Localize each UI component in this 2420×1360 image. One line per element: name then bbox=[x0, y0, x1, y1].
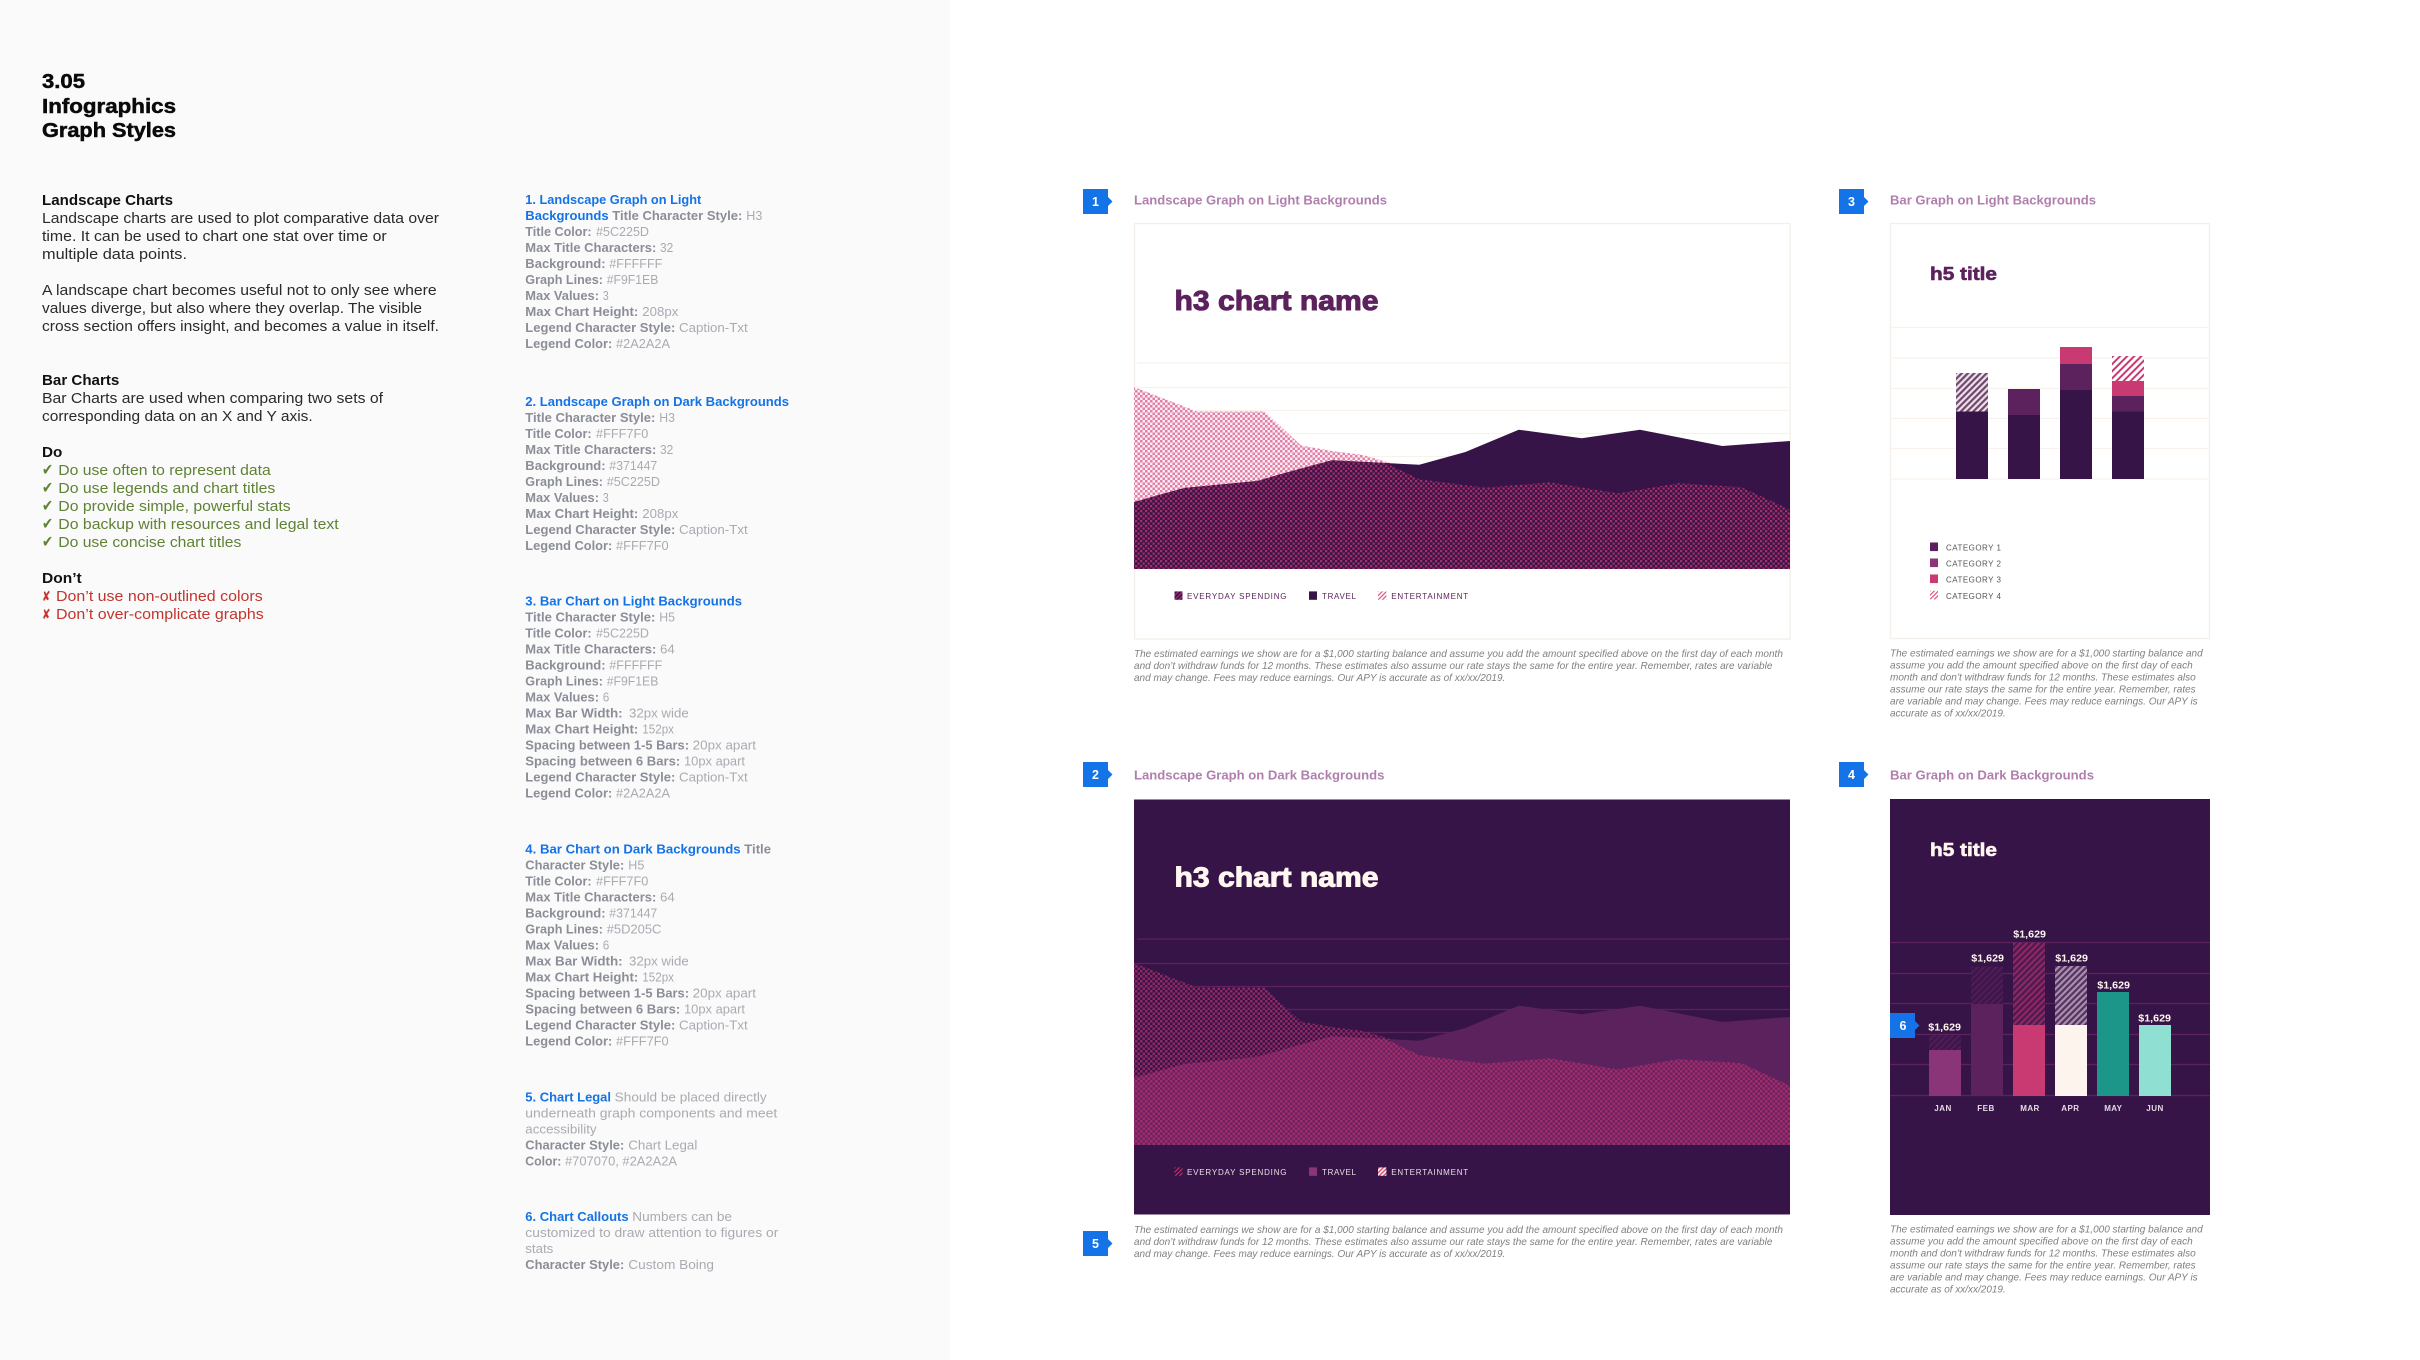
marker 2: 2 bbox=[1092, 768, 1099, 782]
spec block 4: bar chart on dark: Legend Character Style: bbox=[525, 1017, 675, 1032]
spec block 1: landscape graph on light: 208px bbox=[642, 304, 679, 319]
spec block 1: landscape graph on light: Background: bbox=[525, 256, 606, 271]
spec block 3: bar chart on light: Caption-Txt bbox=[679, 770, 748, 784]
legal text chart 2: The estimated earnings we show are for a $1,000 starting balance and assume you add the amount specified above on the first day of each month bbox=[1134, 1224, 1783, 1236]
spec block 3: bar chart on light: #2A2A2A bbox=[616, 786, 670, 800]
bar: mar: MAR bbox=[2020, 1104, 2040, 1113]
spec block 3: bar chart on light: Spacing between 1-5 Bars: bbox=[525, 738, 689, 752]
spec block 4: bar chart on dark: 32px wide bbox=[629, 953, 689, 968]
list: don't: Don’t use non-outlined colors bbox=[56, 588, 263, 605]
legal text chart 2 bbox=[1134, 1224, 1783, 1260]
text block: bar charts: Bar Charts bbox=[42, 372, 119, 389]
spec block 3: bar chart on light: Max Values: bbox=[525, 690, 599, 704]
legal text chart 4 bbox=[1890, 1224, 2204, 1296]
spec block 1: landscape graph on light: Title Color: bbox=[525, 224, 592, 239]
spec block 4: bar chart on dark: H5 bbox=[628, 857, 644, 872]
legal text chart 3: are variable and may change. Fees may reduce earnings. Our APY is bbox=[1890, 696, 2198, 708]
spec block 1: landscape graph on light: #F9F1EB bbox=[607, 272, 658, 287]
spec block 4: bar chart on dark: Legend Color: bbox=[525, 1033, 612, 1048]
spec block 2: landscape graph on dark: Max Title Characters: bbox=[525, 442, 656, 457]
spec block 3: bar chart on light: Title Character Style: bbox=[525, 610, 655, 624]
spec block 1: landscape graph on light: #5C225D bbox=[596, 224, 649, 239]
bar: jan bbox=[1928, 1022, 1961, 1113]
legal text chart 1 bbox=[1134, 648, 1783, 684]
bar: feb: $1,629 bbox=[1971, 952, 2004, 964]
spec block 1: landscape graph on light: #2A2A2A bbox=[616, 336, 670, 351]
bar: jun bbox=[2138, 1012, 2171, 1113]
area: everyday spending bbox=[1134, 1036, 1790, 1145]
panel: bar chart on light background bbox=[1890, 224, 2210, 638]
spec block 4: bar chart on dark: 20px apart bbox=[693, 985, 756, 1000]
bar: jun: $1,629 bbox=[2138, 1012, 2171, 1024]
chart title: h5 title bbox=[1930, 264, 1997, 284]
spec block 3: bar chart on light: Legend Character Style: bbox=[525, 770, 675, 784]
legal text chart 4: accurate as of xx/xx/2019. bbox=[1890, 1284, 2006, 1296]
spec block 3: bar chart on light: Legend Color: bbox=[525, 786, 612, 800]
marker 1 bbox=[1083, 189, 1112, 214]
bar 3 bbox=[2060, 347, 2092, 479]
spec block 4: bar chart on dark: Max Title Characters: bbox=[525, 889, 656, 904]
spec block 4: bar chart on dark: Title bbox=[744, 841, 771, 856]
list: do: ✔ bbox=[42, 532, 53, 551]
spec block 1: landscape graph on light: Max Chart Height: bbox=[525, 304, 638, 319]
spec block 2: landscape graph on dark: Title Character Style: bbox=[525, 410, 655, 425]
spec block 4: bar chart on dark bbox=[525, 841, 771, 1048]
spec block 2: landscape graph on dark: 2. Landscape Graph on Dark Backgrounds bbox=[525, 394, 789, 409]
spec block 4: bar chart on dark: Max Chart Height: bbox=[525, 969, 638, 984]
spec block 5: chart legal: Color: bbox=[525, 1153, 561, 1168]
legal text chart 4: assume you add the amount specified above on the first day of each bbox=[1890, 1236, 2193, 1248]
spec block 5: chart legal: Chart Legal bbox=[628, 1137, 697, 1152]
spec block 1: landscape graph on light: Backgrounds bbox=[525, 208, 609, 223]
legal text chart 2: and don’t withdraw funds for 12 months. These estimates also assume our rate stays the same for the entire year. Remember, rates are variable bbox=[1134, 1236, 1773, 1248]
spec block 1: landscape graph on light: Graph Lines: bbox=[525, 272, 603, 287]
panel: guidelines sidebar bbox=[0, 0, 950, 1360]
spec block 1: landscape graph on light: Max Values: bbox=[525, 288, 599, 303]
chart title: h5 title bbox=[1930, 840, 1997, 860]
text block: landscape charts: time. It can be used to chart one stat over time or bbox=[42, 228, 387, 245]
legend: EVERYDAY SPENDING bbox=[1187, 1168, 1286, 1177]
list: do: Do bbox=[42, 444, 62, 461]
area: entertainment bbox=[1134, 387, 1390, 569]
legal text chart 4: assume our rate stays the same for the entire year. Remember, rates bbox=[1890, 1260, 2196, 1272]
marker 4: 4 bbox=[1848, 768, 1855, 782]
bar: jan: JAN bbox=[1934, 1104, 1952, 1113]
spec block 4: bar chart on dark: #371447 bbox=[609, 905, 657, 920]
spec block 5: chart legal: underneath graph components and meet bbox=[525, 1105, 778, 1120]
text block: landscape charts: Landscape charts are used to plot comparative data over bbox=[42, 210, 439, 227]
area: travel bbox=[1134, 1006, 1790, 1145]
marker 4 bbox=[1839, 762, 1868, 787]
legal text chart 3: assume our rate stays the same for the entire year. Remember, rates bbox=[1890, 684, 2196, 696]
spec block 4: bar chart on dark: 152px bbox=[642, 969, 674, 984]
spec block 3: bar chart on light: 64 bbox=[660, 642, 675, 656]
spec block 4: bar chart on dark: Max Values: bbox=[525, 937, 599, 952]
spec block 5: chart legal: 5. Chart Legal bbox=[525, 1089, 611, 1104]
list: don't: Don’t over-complicate graphs bbox=[56, 606, 264, 623]
spec block 1: landscape graph on light bbox=[525, 192, 762, 351]
spec block 2: landscape graph on dark: #371447 bbox=[609, 458, 657, 473]
text block: landscape charts: Landscape Charts bbox=[42, 192, 173, 209]
list: don't bbox=[42, 570, 264, 623]
spec block 2: landscape graph on dark: 208px bbox=[642, 506, 679, 521]
title bbox=[42, 71, 176, 142]
title: Graph Styles bbox=[42, 120, 176, 142]
spec block 3: bar chart on light: Graph Lines: bbox=[525, 674, 603, 688]
spec block 5: chart legal bbox=[525, 1089, 778, 1168]
marker 6 bbox=[1890, 1013, 1920, 1038]
legend bbox=[1174, 1167, 1468, 1177]
legal text chart 4: The estimated earnings we show are for a $1,000 starting balance and bbox=[1890, 1224, 2204, 1236]
chart title: h3 chart name bbox=[1174, 862, 1378, 892]
heading: landscape light: Landscape Graph on Light Backgrounds bbox=[1134, 192, 1387, 208]
legend: CATEGORY 1 bbox=[1946, 544, 2002, 552]
legal text chart 1: and may change. Fees may reduce earnings. Our APY is accurate as of xx/xx/2019. bbox=[1134, 672, 1505, 684]
legend: CATEGORY 2 bbox=[1946, 560, 2002, 568]
bar: feb bbox=[1971, 952, 2004, 1113]
spec block 2: landscape graph on dark: Legend Character Style: bbox=[525, 522, 675, 537]
list: do: Do provide simple, powerful stats bbox=[58, 498, 291, 515]
spec block 5: chart legal: accessibility bbox=[525, 1121, 597, 1136]
spec block 3: bar chart on light bbox=[525, 594, 756, 800]
spec block 2: landscape graph on dark: Graph Lines: bbox=[525, 474, 603, 489]
area: everyday spending bbox=[1134, 460, 1790, 569]
title: Infographics bbox=[42, 96, 176, 118]
bar: may: MAY bbox=[2104, 1104, 2123, 1113]
spec block 3: bar chart on light: 10px apart bbox=[684, 754, 745, 768]
spec block 2: landscape graph on dark: Title Color: bbox=[525, 426, 592, 441]
spec block 5: chart legal: Should be placed directly bbox=[615, 1089, 767, 1104]
spec block 6: chart callouts: customized to draw attention to figures or bbox=[525, 1225, 779, 1240]
legal text chart 4: month and don’t withdraw funds for 12 months. These estimates also bbox=[1890, 1248, 2196, 1260]
legal text chart 3: The estimated earnings we show are for a $1,000 starting balance and bbox=[1890, 648, 2204, 660]
legal text chart 3: month and don’t withdraw funds for 12 months. These estimates also bbox=[1890, 672, 2196, 684]
spec block 4: bar chart on dark: #FFF7F0 bbox=[616, 1033, 669, 1048]
spec block 3: bar chart on light: 20px apart bbox=[693, 738, 756, 752]
heading: landscape dark: Landscape Graph on Dark Backgrounds bbox=[1134, 768, 1384, 782]
legal text chart 1: The estimated earnings we show are for a $1,000 starting balance and assume you add the amount specified above on the first day of each month bbox=[1134, 648, 1783, 660]
text block: landscape charts: multiple data points. bbox=[42, 246, 187, 263]
bar: jun: JUN bbox=[2146, 1104, 2164, 1113]
bar: feb: FEB bbox=[1977, 1104, 1995, 1113]
bar: apr: $1,629 bbox=[2055, 952, 2088, 964]
legal text chart 4: are variable and may change. Fees may reduce earnings. Our APY is bbox=[1890, 1272, 2198, 1284]
spec block 4: bar chart on dark: Graph Lines: bbox=[525, 921, 603, 936]
marker 3: 3 bbox=[1848, 195, 1855, 209]
list: don't: ✘ bbox=[42, 589, 50, 605]
list: do: Do backup with resources and legal text bbox=[58, 516, 340, 533]
legend: TRAVEL bbox=[1322, 1168, 1357, 1177]
spec block 2: landscape graph on dark: 32 bbox=[660, 442, 673, 457]
list: do: Do use legends and chart titles bbox=[58, 480, 275, 497]
spec block 3: bar chart on light: #FFFFFF bbox=[609, 658, 662, 672]
spec block 3: bar chart on light: #5C225D bbox=[596, 626, 649, 640]
area: entertainment bbox=[1134, 963, 1390, 1145]
spec block 6: chart callouts: stats bbox=[525, 1241, 554, 1256]
legend: CATEGORY 4 bbox=[1946, 592, 2002, 601]
spec block 1: landscape graph on light: Legend Color: bbox=[525, 336, 612, 351]
spec block 3: bar chart on light: 32px wide bbox=[629, 706, 689, 720]
bar: may bbox=[2097, 980, 2130, 1113]
bar: apr: APR bbox=[2061, 1104, 2079, 1113]
marker 5: 5 bbox=[1092, 1237, 1099, 1251]
text block: landscape charts: cross section offers insight, and becomes a value in itself. bbox=[42, 318, 439, 335]
spec block 3: bar chart on light: 152px bbox=[642, 722, 674, 736]
legend: ENTERTAINMENT bbox=[1391, 1168, 1468, 1177]
legal text chart 3 bbox=[1890, 648, 2204, 720]
marker 6: 6 bbox=[1900, 1019, 1907, 1033]
spec block 2: landscape graph on dark: #FFF7F0 bbox=[596, 426, 648, 441]
spec block 1: landscape graph on light: Caption-Txt bbox=[679, 320, 748, 335]
spec block 2: landscape graph on dark: Background: bbox=[525, 458, 606, 473]
legend: CATEGORY 3 bbox=[1946, 576, 2002, 584]
legal text chart 2: and may change. Fees may reduce earnings. Our APY is accurate as of xx/xx/2019. bbox=[1134, 1248, 1505, 1260]
bar 4 bbox=[2112, 356, 2144, 479]
bar: mar: $1,629 bbox=[2013, 928, 2046, 940]
spec block 1: landscape graph on light: #FFFFFF bbox=[609, 256, 662, 271]
text block: landscape charts: A landscape chart becomes useful not to only see where bbox=[42, 282, 437, 299]
text block: bar charts: Bar Charts are used when comparing two sets of bbox=[42, 390, 384, 407]
spec block 2: landscape graph on dark: 3 bbox=[603, 490, 609, 505]
legend: EVERYDAY SPENDING bbox=[1187, 592, 1286, 601]
spec block 4: bar chart on dark: Max Bar Width: bbox=[525, 953, 623, 968]
bar: may: $1,629 bbox=[2097, 980, 2130, 992]
spec block 3: bar chart on light: 3. Bar Chart on Light Backgrounds bbox=[525, 594, 742, 608]
chart title: h3 chart name bbox=[1174, 285, 1378, 316]
spec block 1: landscape graph on light: H3 bbox=[746, 208, 762, 223]
heading: bar dark: Bar Graph on Dark Backgrounds bbox=[1890, 768, 2094, 782]
legal text chart 3: accurate as of xx/xx/2019. bbox=[1890, 708, 2006, 720]
spec block 4: bar chart on dark: #FFF7F0 bbox=[596, 873, 648, 888]
marker 5 bbox=[1083, 1231, 1112, 1256]
spec block 1: landscape graph on light: 1. Landscape Graph on Light bbox=[525, 192, 702, 207]
legend bbox=[1930, 542, 2002, 601]
list: do: ✔ bbox=[42, 478, 53, 497]
spec block 3: bar chart on light: Max Bar Width: bbox=[525, 706, 623, 720]
spec block 3: bar chart on light: Background: bbox=[525, 658, 606, 672]
spec block 3: bar chart on light: 6 bbox=[603, 690, 609, 704]
spec block 4: bar chart on dark: Caption-Txt bbox=[679, 1017, 748, 1032]
spec block 4: bar chart on dark: 64 bbox=[660, 889, 675, 904]
list: do: ✔ bbox=[42, 460, 53, 479]
panel: landscape chart on light background bbox=[1134, 224, 1790, 639]
spec block 4: bar chart on dark: 6 bbox=[603, 937, 609, 952]
marker 2 bbox=[1083, 762, 1112, 787]
spec block 4: bar chart on dark: Spacing between 6 Bars: bbox=[525, 1001, 680, 1016]
list: don't: Don’t bbox=[42, 570, 82, 587]
legal text chart 3: assume you add the amount specified above on the first day of each bbox=[1890, 660, 2193, 672]
spec block 1: landscape graph on light: Title Character Style: bbox=[612, 208, 742, 223]
spec block 4: bar chart on dark: #5D205C bbox=[607, 921, 661, 936]
spec block 2: landscape graph on dark: Max Values: bbox=[525, 490, 599, 505]
panel: bar chart on dark background bbox=[1890, 799, 2210, 1215]
spec block 1: landscape graph on light: Legend Character Style: bbox=[525, 320, 675, 335]
list: do bbox=[42, 444, 340, 551]
spec block 5: chart legal: #707070, #2A2A2A bbox=[565, 1153, 677, 1168]
spec block 6: chart callouts: Numbers can be bbox=[632, 1209, 732, 1224]
spec block 3: bar chart on light: Title Color: bbox=[525, 626, 592, 640]
spec block 2: landscape graph on dark: Legend Color: bbox=[525, 538, 612, 553]
panel: landscape chart on dark background bbox=[1134, 800, 1790, 1214]
spec block 3: bar chart on light: Max Chart Height: bbox=[525, 722, 638, 736]
spec block 3: bar chart on light: Max Title Characters: bbox=[525, 642, 656, 656]
bar: mar bbox=[2013, 928, 2046, 1113]
spec block 6: chart callouts bbox=[525, 1209, 779, 1272]
list: do: ✔ bbox=[42, 496, 53, 515]
spec block 4: bar chart on dark: Character Style: bbox=[525, 857, 624, 872]
text block: landscape charts bbox=[42, 192, 439, 335]
spec block 2: landscape graph on dark: Max Chart Height: bbox=[525, 506, 638, 521]
text block: landscape charts: values diverge, but also where they overlap. The visible bbox=[42, 300, 422, 317]
area: travel bbox=[1134, 430, 1790, 569]
list: do: Do use often to represent data bbox=[58, 462, 271, 479]
marker 1: 1 bbox=[1092, 195, 1099, 209]
spec block 2: landscape graph on dark: #5C225D bbox=[607, 474, 660, 489]
legend: ENTERTAINMENT bbox=[1391, 592, 1468, 601]
title: 3.05 bbox=[42, 71, 85, 93]
spec block 2: landscape graph on dark: H3 bbox=[659, 410, 675, 425]
spec block 4: bar chart on dark: Title Color: bbox=[525, 873, 592, 888]
spec block 3: bar chart on light: #F9F1EB bbox=[607, 674, 658, 688]
bar: jan: $1,629 bbox=[1928, 1022, 1961, 1034]
legal text chart 1: and don’t withdraw funds for 12 months. These estimates also assume our rate stays the same for the entire year. Remember, rates are variable bbox=[1134, 660, 1773, 672]
spec block 1: landscape graph on light: Max Title Characters: bbox=[525, 240, 656, 255]
spec block 3: bar chart on light: H5 bbox=[659, 610, 675, 624]
spec block 6: chart callouts: 6. Chart Callouts bbox=[525, 1209, 629, 1224]
spec block 5: chart legal: Character Style: bbox=[525, 1137, 624, 1152]
spec block 6: chart callouts: Character Style: bbox=[525, 1257, 624, 1272]
legend bbox=[1174, 591, 1468, 601]
text block: bar charts: corresponding data on an X and Y axis. bbox=[42, 408, 313, 425]
bar 1 bbox=[1956, 373, 1988, 479]
heading: bar light: Bar Graph on Light Backgrounds bbox=[1890, 192, 2096, 208]
text block: bar charts bbox=[42, 372, 384, 425]
legend: TRAVEL bbox=[1322, 592, 1357, 601]
spec block 4: bar chart on dark: 10px apart bbox=[684, 1001, 745, 1016]
bar 2 bbox=[2008, 389, 2040, 479]
marker 3 bbox=[1839, 189, 1868, 214]
spec block 1: landscape graph on light: 32 bbox=[660, 240, 673, 255]
spec block 4: bar chart on dark: Background: bbox=[525, 905, 606, 920]
list: do: ✔ bbox=[42, 514, 53, 533]
spec block 1: landscape graph on light: 3 bbox=[603, 288, 609, 303]
spec block 6: chart callouts: Custom Boing bbox=[628, 1257, 714, 1272]
bar: apr bbox=[2055, 952, 2088, 1113]
list: don't: ✘ bbox=[42, 607, 50, 623]
spec block 4: bar chart on dark: Spacing between 1-5 Bars: bbox=[525, 985, 689, 1000]
spec block 3: bar chart on light: Spacing between 6 Bars: bbox=[525, 754, 680, 768]
spec block 2: landscape graph on dark bbox=[525, 394, 789, 553]
spec block 4: bar chart on dark: 4. Bar Chart on Dark Backgrounds bbox=[525, 841, 741, 856]
spec block 2: landscape graph on dark: #FFF7F0 bbox=[616, 538, 669, 553]
spec block 2: landscape graph on dark: Caption-Txt bbox=[679, 522, 748, 537]
list: do: Do use concise chart titles bbox=[58, 534, 241, 551]
